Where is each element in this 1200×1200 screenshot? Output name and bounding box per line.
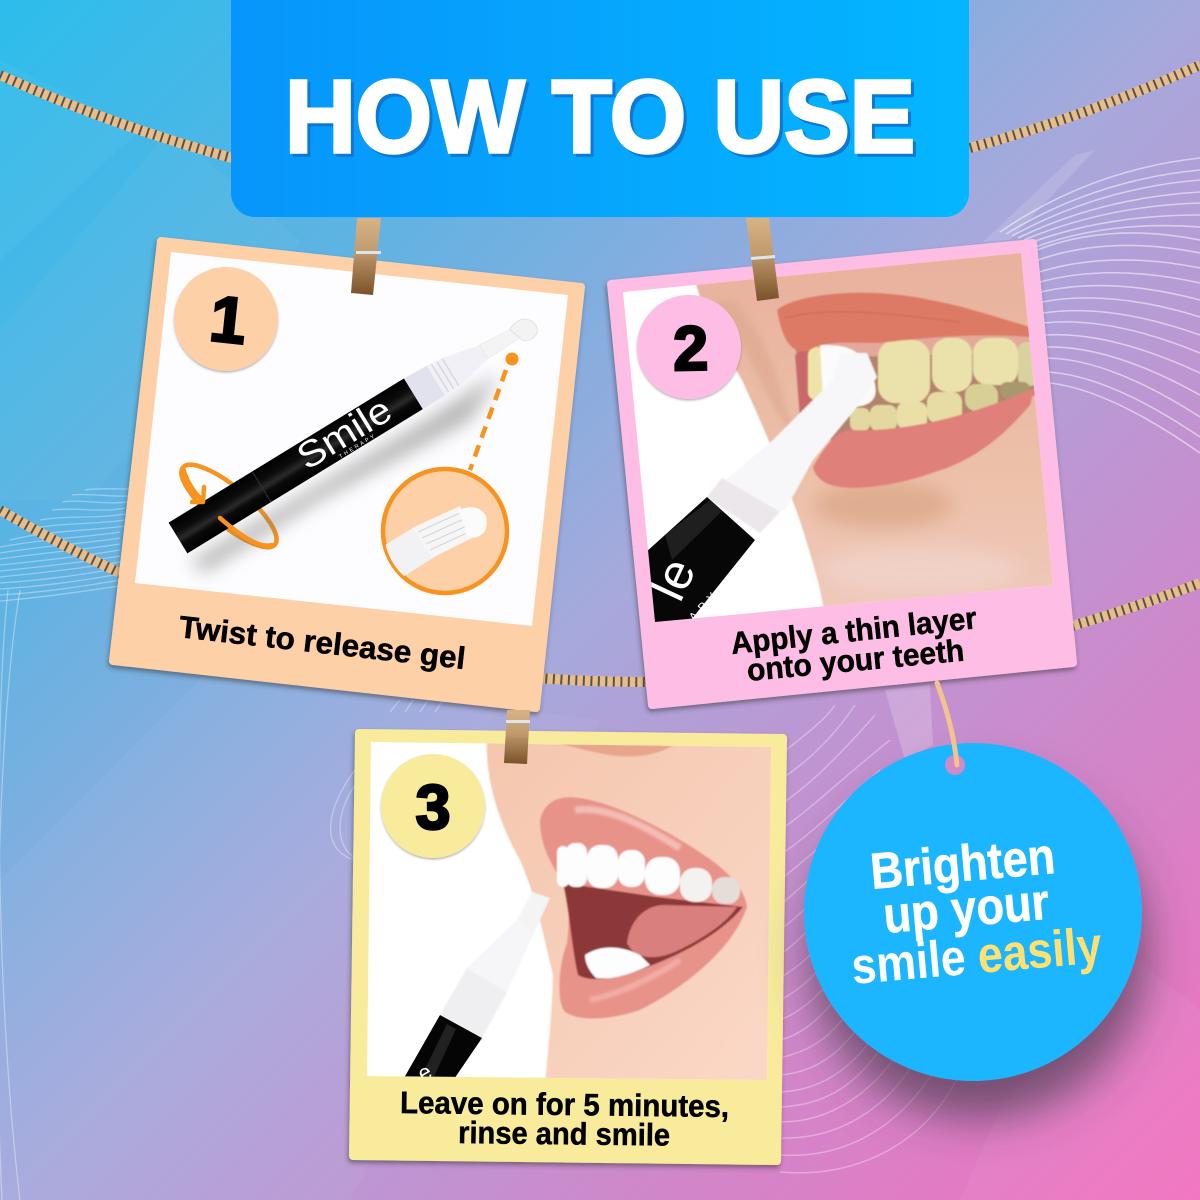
rope: middle left: [0, 510, 122, 574]
number badge 3: 3: [415, 773, 451, 843]
pen logo: THERAPY: [338, 433, 378, 460]
caption 2: [729, 600, 978, 688]
number badge 1: 1: [207, 281, 250, 358]
panel: step 1 twist: [113, 241, 581, 708]
tag text: Brighten: [868, 827, 1057, 900]
pen logo: Smile: [290, 389, 399, 478]
pen product: [166, 301, 543, 554]
pen logo fragment: APY: [686, 586, 723, 624]
caption 2: onto your teeth: [745, 633, 966, 688]
pen logo fragment: [651, 563, 712, 618]
tag hole: [945, 755, 965, 775]
clothespin 3: [504, 710, 530, 764]
background contour lines: top right: [983, 150, 1200, 453]
number badge 2: [637, 295, 741, 399]
background contour lines: bottom centre: [780, 685, 965, 1173]
orbit arrow back: [171, 453, 287, 559]
pen shadow: [190, 372, 500, 572]
hanging tag: [804, 683, 1142, 1081]
pen logo fragment: e: [413, 1059, 436, 1086]
rope: top right: [970, 65, 1200, 148]
photo: open mouth: [400, 740, 775, 1086]
caption 3: Leave on for 5 minutes,: [400, 1085, 729, 1124]
header banner: [231, 0, 969, 217]
caption 1: Twist to release gel: [177, 609, 467, 676]
callout magnified tip: [380, 469, 507, 593]
tag text: up your: [881, 873, 1051, 944]
caption 3: [400, 1085, 729, 1153]
rope: top left: [0, 75, 232, 158]
photo: mouth with gel: [639, 240, 1060, 628]
number badge 2: 2: [673, 314, 709, 384]
rope: middle right: [1072, 583, 1200, 626]
panel: step 2 apply: [611, 240, 1073, 705]
clothespin 2: [746, 218, 779, 301]
title: HOW TO USE: [285, 59, 915, 174]
number badge 3: [381, 754, 485, 858]
background contour lines: left: [0, 489, 443, 1200]
clothespin 1: [351, 218, 381, 295]
tag text: smile easily: [849, 916, 1105, 995]
caption 2: Apply a thin layer: [729, 600, 978, 661]
tag string: [937, 683, 957, 765]
panel: step 3 leave on: [353, 733, 783, 1161]
tag text: [849, 827, 1105, 995]
pen logo fragment: le: [639, 550, 706, 609]
number badge 1: [174, 267, 278, 371]
orbit arrow front: [183, 468, 272, 546]
callout dot and dashed leader: [470, 352, 518, 470]
caption 3: rinse and smile: [458, 1115, 670, 1153]
rope: middle centre: [538, 678, 650, 682]
